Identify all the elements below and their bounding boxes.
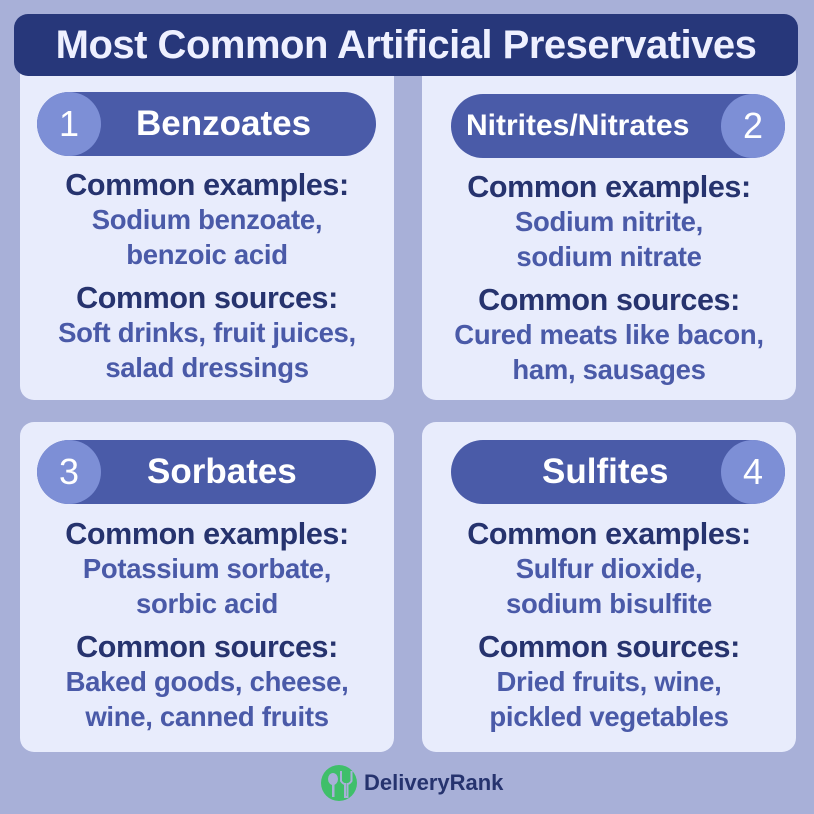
text: sulfites: Dried fruits, wine,	[496, 666, 722, 697]
pill: benzoates: 1	[59, 103, 79, 144]
logo	[321, 765, 504, 801]
text: sulfites	[467, 517, 751, 732]
text: sorbates: Common sources:	[76, 630, 338, 664]
text: sorbates: Common examples:	[65, 517, 349, 551]
pill: benzoates: Benzoates	[136, 104, 311, 143]
text: nitrites: Cured meats like bacon,	[454, 319, 764, 350]
text: benzoates: benzoic acid	[126, 239, 288, 270]
pill: sorbates	[37, 440, 376, 504]
text: nitrites	[454, 170, 764, 385]
pill: sulfites: 4	[743, 451, 763, 492]
text: nitrites: sodium nitrate	[516, 241, 702, 272]
text: sorbates	[65, 517, 349, 732]
text: benzoates: Common sources:	[76, 281, 338, 315]
text: sorbates: sorbic acid	[136, 588, 278, 619]
text: sorbates: Potassium sorbate,	[83, 553, 331, 584]
text: sorbates: Baked goods, cheese,	[66, 666, 348, 697]
text: nitrites: ham, sausages	[512, 354, 706, 385]
pill: sulfites: Sulfites	[542, 452, 668, 491]
text: sulfites: Common sources:	[478, 630, 740, 664]
text: sulfites: sodium bisulfite	[506, 588, 712, 619]
text: benzoates: Common examples:	[65, 168, 349, 202]
text: sulfites: pickled vegetables	[489, 701, 729, 732]
panel: sorbates	[20, 422, 394, 752]
text: benzoates: Soft drinks, fruit juices,	[58, 317, 356, 348]
pill: sorbates: Sorbates	[147, 452, 297, 491]
text: nitrites: Common sources:	[478, 283, 740, 317]
panel: nitrites	[422, 60, 796, 400]
text: nitrites: Common examples:	[467, 170, 751, 204]
text: sulfites: Common examples:	[467, 517, 751, 551]
title	[14, 14, 798, 76]
pill: nitrites: 2	[743, 105, 763, 146]
icon: logo	[321, 765, 357, 801]
panel: sulfites	[422, 422, 796, 752]
text: nitrites: Sodium nitrite,	[515, 206, 703, 237]
text: benzoates	[58, 168, 356, 383]
text: benzoates: salad dressings	[105, 352, 309, 383]
panel: benzoates	[20, 60, 394, 400]
title: Most Common Artificial Preservatives	[56, 23, 756, 67]
pill: benzoates	[37, 92, 376, 156]
pill: nitrites	[451, 94, 785, 158]
text: benzoates: Sodium benzoate,	[92, 204, 322, 235]
text: sulfites: Sulfur dioxide,	[516, 553, 702, 584]
pill: sulfites	[451, 440, 785, 504]
pill: sorbates: 3	[59, 451, 79, 492]
text: sorbates: wine, canned fruits	[85, 701, 329, 732]
pill: nitrites: Nitrites/Nitrates	[466, 109, 689, 142]
logo text: DeliveryRank	[364, 770, 503, 795]
